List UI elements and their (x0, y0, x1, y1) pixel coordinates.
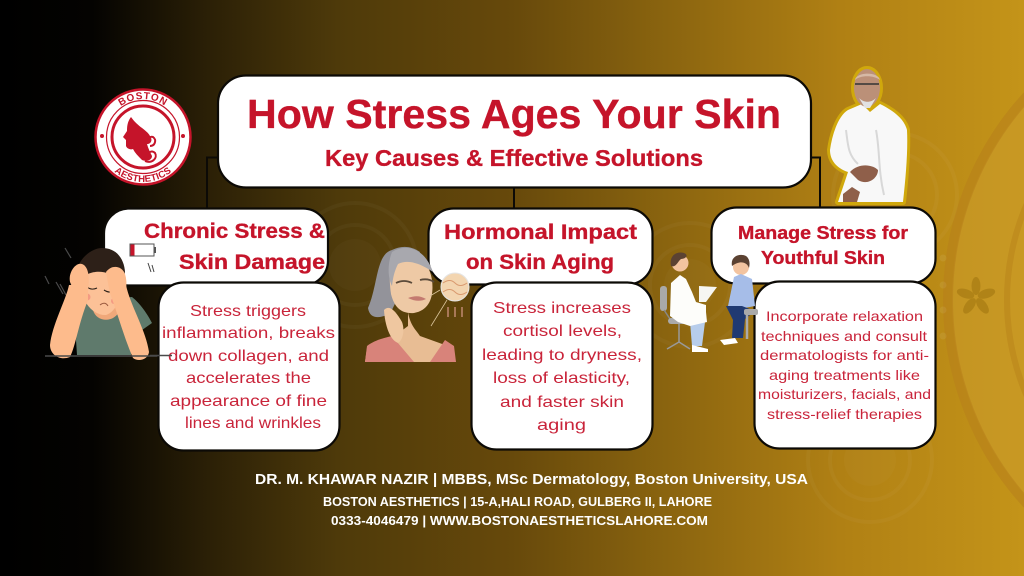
heading: hormonal impact: on Skin Aging (466, 251, 614, 274)
text: incorporate relaxation (758, 308, 931, 422)
table line (150, 354, 172, 356)
heading: chronic stress (144, 220, 325, 274)
text: stress triggers: accelerates the (186, 370, 311, 387)
illustration: older woman (365, 247, 469, 362)
text: stress increases: and faster skin (500, 394, 624, 411)
panel: chronic stress body (158, 282, 340, 450)
illustration: doctor and patient (660, 253, 758, 352)
text: stress increases (482, 300, 642, 434)
heading: chronic stress: Chronic Stress & (144, 220, 325, 243)
text: stress increases: cortisol levels, (503, 323, 622, 340)
panel: hormonal impact (428, 208, 652, 284)
icon: low battery (130, 244, 156, 272)
logo: Boston Aesthetics: AESTHETICS (114, 168, 171, 182)
title: How Stress Ages Your Skin (247, 91, 781, 137)
connectors (207, 158, 820, 209)
subtitle: Key Causes & Effective Solutions (325, 145, 703, 171)
text: incorporate relaxation: aging treatments like (769, 367, 920, 383)
text: stress increases: aging (537, 417, 586, 434)
logo: Boston Aesthetics: BOSTON (118, 92, 168, 106)
heading: manage stress (738, 223, 908, 268)
panel: manage stress (712, 208, 936, 284)
text: stress triggers: down collagen, and (168, 348, 329, 365)
illustration: stressed man (45, 248, 165, 360)
heading: chronic stress: Skin Damage (179, 251, 325, 274)
logo: Boston Aesthetics (94, 88, 192, 186)
text: stress triggers: inflammation, breaks (162, 325, 335, 342)
text: stress increases: leading to dryness, (482, 347, 642, 364)
footer text: 0333-4046479 | WWW.BOSTONAESTHETICSLAHORE.COM (331, 514, 708, 528)
heading: hormonal impact (444, 221, 637, 274)
footer text: DR. M. KHAWAR NAZIR | MBBS, MSc Dermatology, Boston University, USA (255, 472, 809, 488)
heading: manage stress: Youthful Skin (761, 248, 885, 268)
text: incorporate relaxation: Incorporate relaxation (766, 308, 923, 324)
portrait: doctor (830, 69, 907, 202)
text: incorporate relaxation: moisturizers, facials, and (758, 386, 931, 402)
text: stress triggers: lines and wrinkles (185, 415, 321, 432)
text: stress triggers (162, 303, 335, 432)
text: stress increases: loss of elasticity, (493, 370, 630, 387)
text: stress triggers: appearance of fine (170, 393, 327, 410)
text: stress triggers: Stress triggers (190, 303, 306, 320)
text: incorporate relaxation: stress-relief therapies (767, 406, 922, 422)
footer text: BOSTON AESTHETICS | 15-A,HALI ROAD, GULBERG II, LAHORE (323, 495, 712, 509)
footer text (255, 472, 809, 528)
heading: manage stress: Manage Stress for (738, 223, 908, 243)
text: stress increases: Stress increases (493, 300, 631, 317)
text: incorporate relaxation: dermatologists for anti- (760, 347, 929, 363)
panel: hormonal impact body (472, 282, 652, 450)
panel: title (218, 76, 811, 188)
panel: manage stress body (754, 282, 936, 448)
heading: hormonal impact: Hormonal Impact (444, 221, 637, 244)
panel: chronic stress (104, 208, 328, 286)
text: incorporate relaxation: techniques and consult (761, 328, 927, 344)
